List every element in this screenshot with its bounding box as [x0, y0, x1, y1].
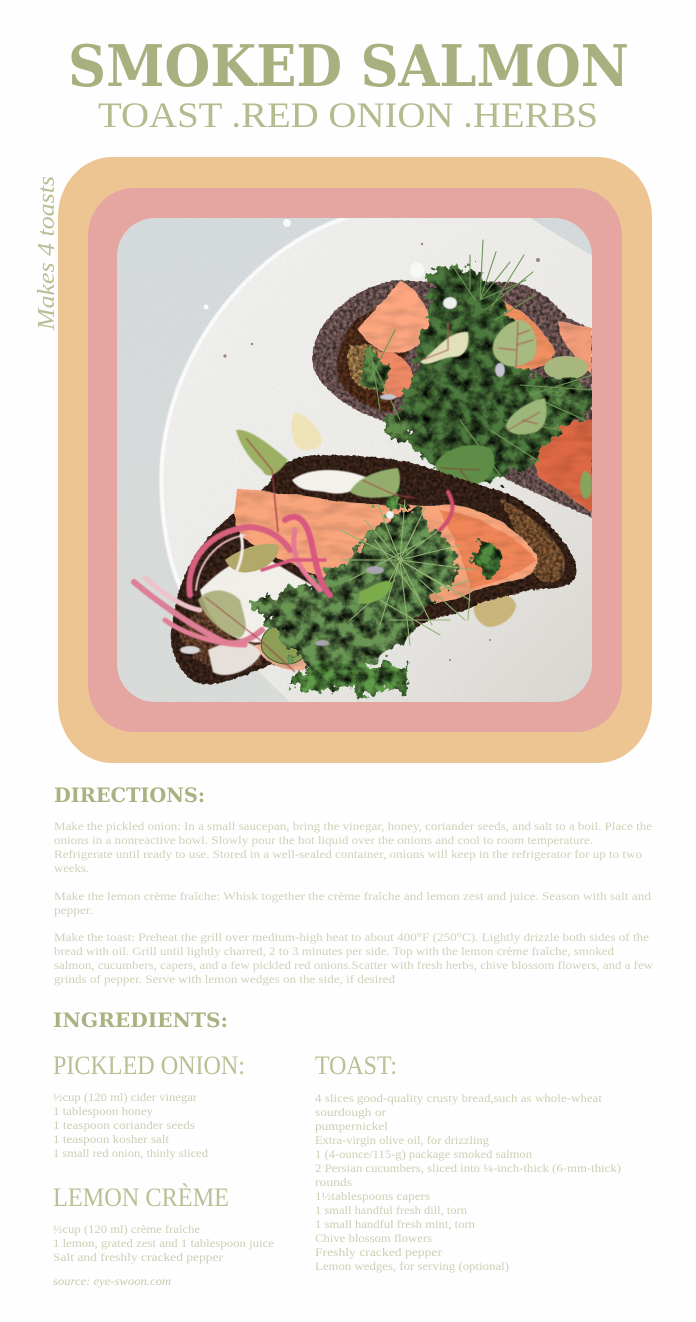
lower toast crust and bread: [171, 455, 577, 684]
dill strands: [340, 500, 475, 645]
list: lemon creme ingredients: Salt and freshly cracked pepper: [53, 1250, 223, 1264]
text block: directions, lemon creme: Make the lemon crème fraîche: Whisk together the crème fraîche and lemon zest and juice. Season with salt and: [54, 889, 651, 903]
list: toast ingredients: 4 slices good-quality crusty bread,such as whole-wheat: [315, 1091, 603, 1105]
list: pickled onion ingredients: 1 small red onion, thinly sliced: [53, 1146, 208, 1160]
source credit: source: eye-swoon.com: [53, 1274, 171, 1288]
text block: directions, pickled onion: Refrigerate until ready to use. Stored in a well-sealed container, onions will keep in the refrigerator for up to two: [54, 847, 642, 861]
upper fine herbs: [370, 240, 592, 475]
creme fraiche: [292, 470, 368, 494]
list: toast ingredients: 1 small handful fresh dill, torn: [315, 1203, 467, 1217]
list: pickled onion ingredients: 1 teaspoon kosher salt: [53, 1132, 170, 1146]
list: pickled onion ingredients: 1 tablespoon honey: [53, 1104, 153, 1118]
subtitle: TOAST .RED ONION .HERBS: [98, 95, 598, 135]
list: lemon creme ingredients: 1 lemon, grated zest and 1 tablespoon juice: [53, 1236, 274, 1250]
list: lemon creme ingredients: ½cup (120 ml) crème fraîche: [53, 1222, 200, 1236]
list: toast ingredients: Lemon wedges, for serving (optional): [315, 1259, 509, 1273]
text block: directions, pickled onion: [54, 819, 652, 875]
list: toast ingredients: rounds: [315, 1175, 352, 1189]
lower herb mass: [255, 484, 502, 694]
cucumber: [260, 627, 303, 665]
subheading: lemon creme: LEMON CRÈME: [53, 1183, 229, 1212]
list: toast ingredients: 1 small handful fresh mint, torn: [315, 1217, 475, 1231]
text block: directions, pickled onion: Make the pickled onion: In a small saucepan, bring the vinegar, honey, coriander seeds, and salt to a boil. Place the: [54, 819, 652, 833]
text block: directions, pickled onion: onions in a nonreactive bowl. Slowly pour the hot liquid over the onions and cool to room temperature.: [54, 833, 593, 847]
plate: [161, 218, 592, 702]
upper toast crust: [312, 280, 592, 518]
list: toast ingredients: Extra-virgin olive oil, for drizzling: [315, 1133, 489, 1147]
list: toast ingredients: [315, 1091, 621, 1273]
lower salmon: [234, 488, 538, 670]
text block: directions, toast: grinds of pepper. Serve with lemon wedges on the side, if desired: [54, 972, 395, 986]
yield label: makes 4 toasts: Makes 4 toasts: [34, 176, 60, 331]
panel: pink inner frame: [88, 188, 622, 732]
list: toast ingredients: pumpernickel: [315, 1119, 389, 1133]
list: pickled onion ingredients: 1 teaspoon coriander seeds: [53, 1118, 195, 1132]
subheading: toast: TOAST:: [315, 1051, 397, 1080]
list: pickled onion ingredients: ½cup (120 ml) cider vinegar: [53, 1090, 197, 1104]
list: toast ingredients: Freshly cracked pepper: [315, 1245, 442, 1259]
upper herb mass: [361, 267, 592, 482]
list: lemon creme ingredients: [53, 1222, 274, 1264]
oil drops: [291, 412, 322, 450]
text block: directions, lemon creme: pepper.: [54, 903, 93, 917]
title: SMOKED SALMON: [68, 33, 629, 100]
pickled red onion: [134, 492, 453, 645]
upper salmon: [358, 281, 592, 512]
list: pickled onion ingredients: [53, 1090, 208, 1160]
text block: directions, pickled onion: weeks.: [54, 861, 89, 875]
list: toast ingredients: 1 (4-ounce/115-g) package smoked salmon: [315, 1147, 532, 1161]
text block: directions, toast: Make the toast: Preheat the grill over medium-high heat to about 400°F (250°C). Lightly drizzle both sides of the: [54, 930, 649, 944]
text block: directions, toast: bread with oil. Grill until lightly charred, 2 to 3 minutes per side. Top with the lemon crème fraîche, smoked: [54, 944, 614, 958]
list: toast ingredients: sourdough or: [315, 1105, 386, 1119]
list: toast ingredients: 1½tablespoons capers: [315, 1189, 430, 1203]
food photo illustration: [117, 218, 592, 702]
heading: ingredients: INGREDIENTS:: [53, 1008, 228, 1032]
list: toast ingredients: Chive blossom flowers: [315, 1231, 432, 1245]
subheading: pickled onion: PICKLED ONION:: [53, 1051, 245, 1080]
beet leaves lower: [180, 430, 415, 672]
list: toast ingredients: 2 Persian cucumbers, sliced into ¼-inch-thick (6-mm-thick): [315, 1161, 621, 1175]
panel: orange outer frame: [58, 157, 652, 763]
text block: directions, lemon creme: [54, 889, 651, 917]
text block: directions, toast: salmon, cucumbers, capers, and a few pickled red onions.Scatter with fresh herbs, chive blossom flowers, and a few: [54, 958, 653, 972]
text block: directions, toast: [54, 930, 653, 986]
heading: directions: DIRECTIONS:: [54, 783, 205, 807]
upper beet leaves: [380, 297, 592, 499]
